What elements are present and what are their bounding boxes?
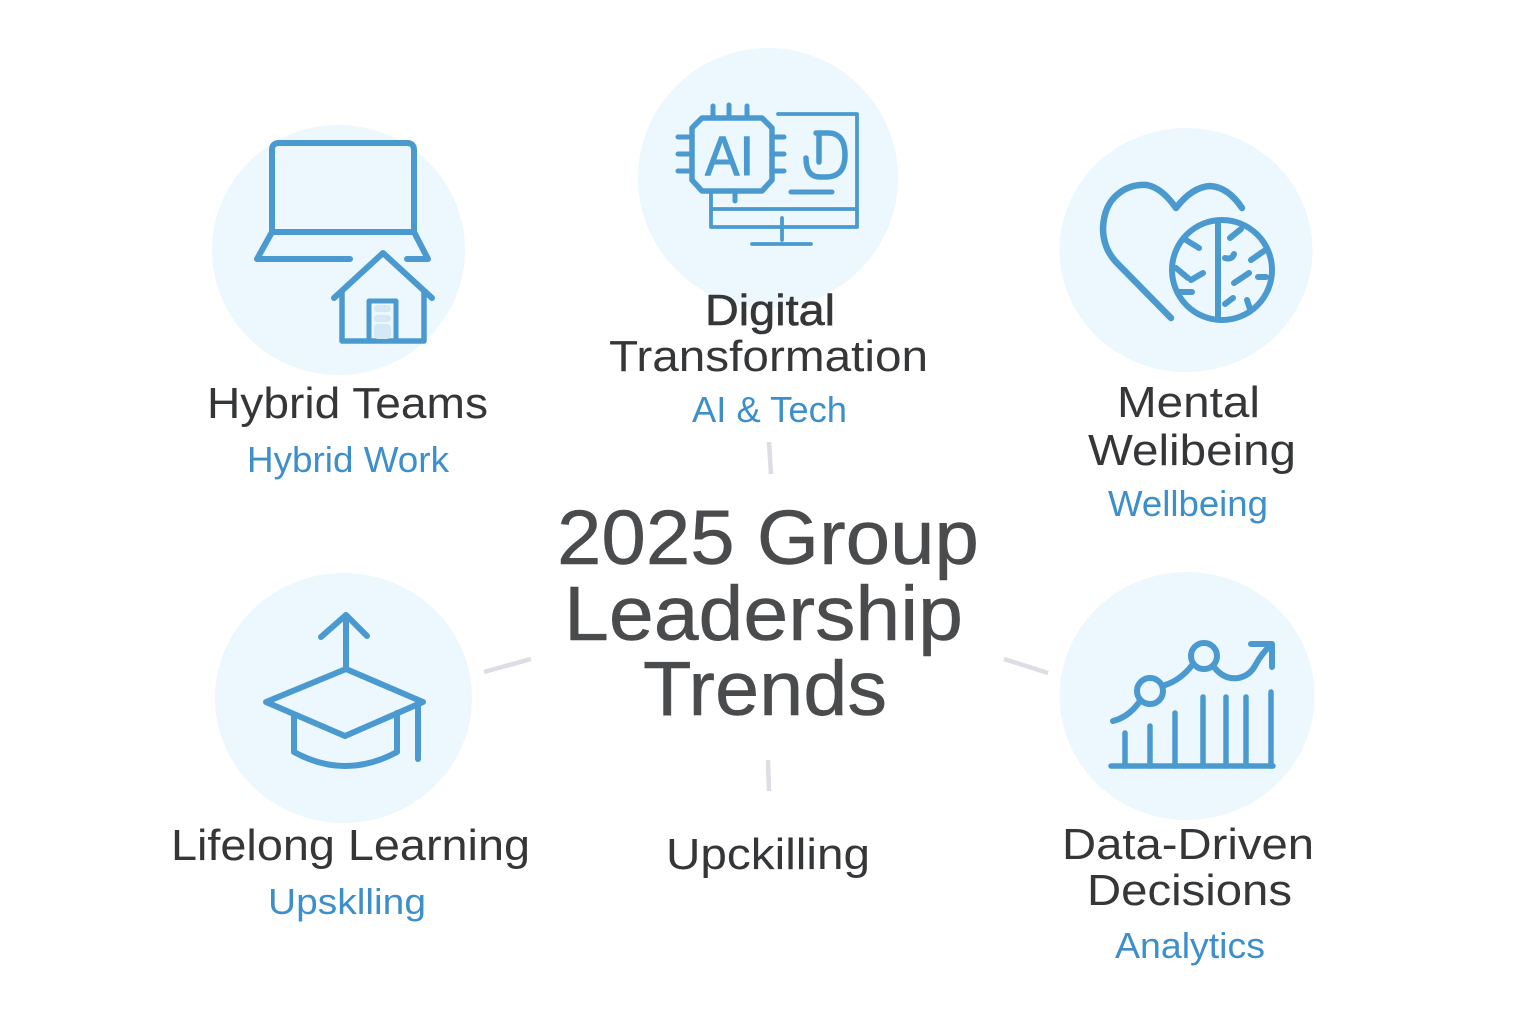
- label: upskilling centre: Upckilling: [666, 830, 870, 879]
- icon background: upskilling: [215, 573, 472, 823]
- heading: data-driven decisions: Decisions: [1087, 866, 1292, 915]
- connector: left: [484, 659, 531, 672]
- icon: graduation cap with arrow: [266, 615, 423, 766]
- heading: data-driven decisions: Data-Driven: [1062, 820, 1314, 869]
- heading: hybrid teams: Hybrid Teams: [207, 379, 488, 428]
- title: [557, 495, 979, 732]
- icon: chart with rising arrow: [1111, 643, 1273, 766]
- connector: top: [769, 442, 771, 474]
- icon background: hybrid work: [212, 125, 465, 375]
- icon: laptop and house: [257, 143, 432, 341]
- subheading: AI and tech: AI & Tech: [692, 389, 847, 430]
- panel: hybrid work: [207, 125, 488, 480]
- panel: wellbeing: [1060, 128, 1312, 524]
- heading: digital transformation: Digital: [705, 286, 835, 335]
- subheading: upskilling: Upsklling: [268, 881, 426, 922]
- icon: AI chip and monitor: [678, 105, 857, 244]
- title: 2025 Group: [557, 495, 979, 581]
- icon background: analytics: [1060, 572, 1314, 820]
- icon: heart and brain: [1103, 185, 1272, 320]
- panel: AI and tech: [609, 48, 928, 430]
- icon background: wellbeing: [1060, 128, 1312, 372]
- icon background: AI and tech: [638, 48, 898, 308]
- heading: mental wellbeing: Welibeing: [1088, 426, 1296, 475]
- connector: right: [1004, 659, 1048, 673]
- panel: analytics: [1060, 572, 1314, 966]
- heading: digital transformation: [609, 286, 928, 381]
- title: Leadership: [564, 571, 963, 657]
- heading: data-driven decisions: [1062, 820, 1314, 915]
- heading: mental wellbeing: [1088, 378, 1296, 475]
- title: Trends: [643, 646, 887, 732]
- panel: upskilling: [171, 573, 530, 922]
- subheading: wellbeing: Wellbeing: [1108, 483, 1268, 524]
- heading: lifelong learning: Lifelong Learning: [171, 821, 530, 870]
- connector: bottom: [768, 760, 769, 791]
- subheading: hybrid work: Hybrid Work: [247, 439, 450, 480]
- heading: mental wellbeing: Mental: [1117, 378, 1260, 427]
- heading: digital transformation: Transformation: [609, 332, 928, 381]
- subheading: analytics: Analytics: [1115, 925, 1265, 966]
- icon: AI chip and monitor: AI: [705, 124, 754, 187]
